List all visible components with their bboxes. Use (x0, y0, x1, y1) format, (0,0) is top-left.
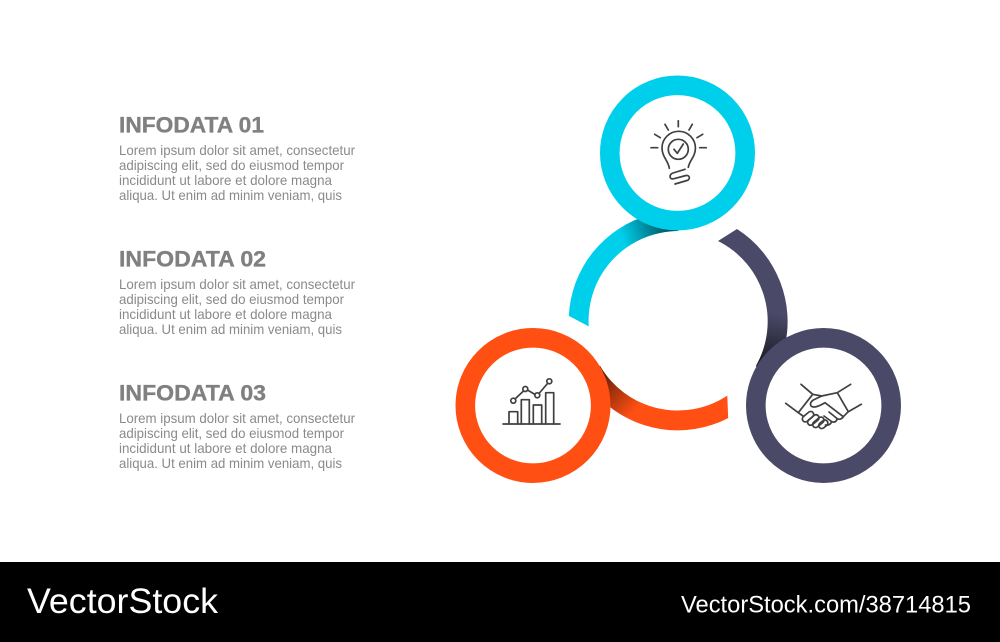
body text: infodata 01: adipiscing elit, sed do eiusmod tempor (119, 157, 344, 173)
body text: infodata 03: aliqua. Ut enim ad minim veniam, quis (119, 455, 342, 471)
ring: navy circle (756, 338, 891, 473)
icon: handshake (786, 384, 861, 430)
icon: light bulb with check mark (651, 121, 706, 184)
body text: infodata 02: incididunt ut labore et dolore magna (119, 306, 332, 322)
footer logo text: VectorStock (27, 582, 219, 621)
footer url text: VectorStock.com/38714815 (681, 592, 971, 618)
icon: bar chart with trend line (503, 379, 560, 424)
text block: infodata 02 (119, 246, 355, 337)
body text: infodata 01: incididunt ut labore et dolore magna (119, 172, 332, 188)
footer bar (0, 562, 1000, 642)
body text: infodata 03 (119, 410, 355, 471)
body text: infodata 03: adipiscing elit, sed do eiusmod tempor (119, 425, 344, 441)
arc: orange ribbon (579, 330, 738, 462)
arc: cyan ribbon (544, 201, 702, 332)
ring: cyan circle (610, 85, 745, 221)
body text: infodata 02: adipiscing elit, sed do eiusmod tempor (119, 291, 344, 307)
body text: infodata 03: Lorem ipsum dolor sit amet, consectetur (119, 410, 355, 426)
text block: infodata 01 (119, 112, 355, 203)
text block: infodata 03 (119, 380, 355, 471)
body text: infodata 01: aliqua. Ut enim ad minim veniam, quis (119, 187, 342, 203)
heading: infodata 03: INFODATA 03 (119, 380, 266, 406)
ring: orange circle (465, 338, 601, 473)
body text: infodata 02: aliqua. Ut enim ad minim veniam, quis (119, 321, 342, 337)
body text: infodata 01: Lorem ipsum dolor sit amet, consectetur (119, 142, 355, 158)
arc: navy ribbon (718, 229, 788, 372)
heading: infodata 02: INFODATA 02 (119, 246, 266, 272)
body text: infodata 01 (119, 142, 355, 203)
body text: infodata 02 (119, 276, 355, 337)
body text: infodata 03: incididunt ut labore et dolore magna (119, 440, 332, 456)
body text: infodata 02: Lorem ipsum dolor sit amet, consectetur (119, 276, 355, 292)
heading: infodata 01: INFODATA 01 (119, 112, 264, 138)
